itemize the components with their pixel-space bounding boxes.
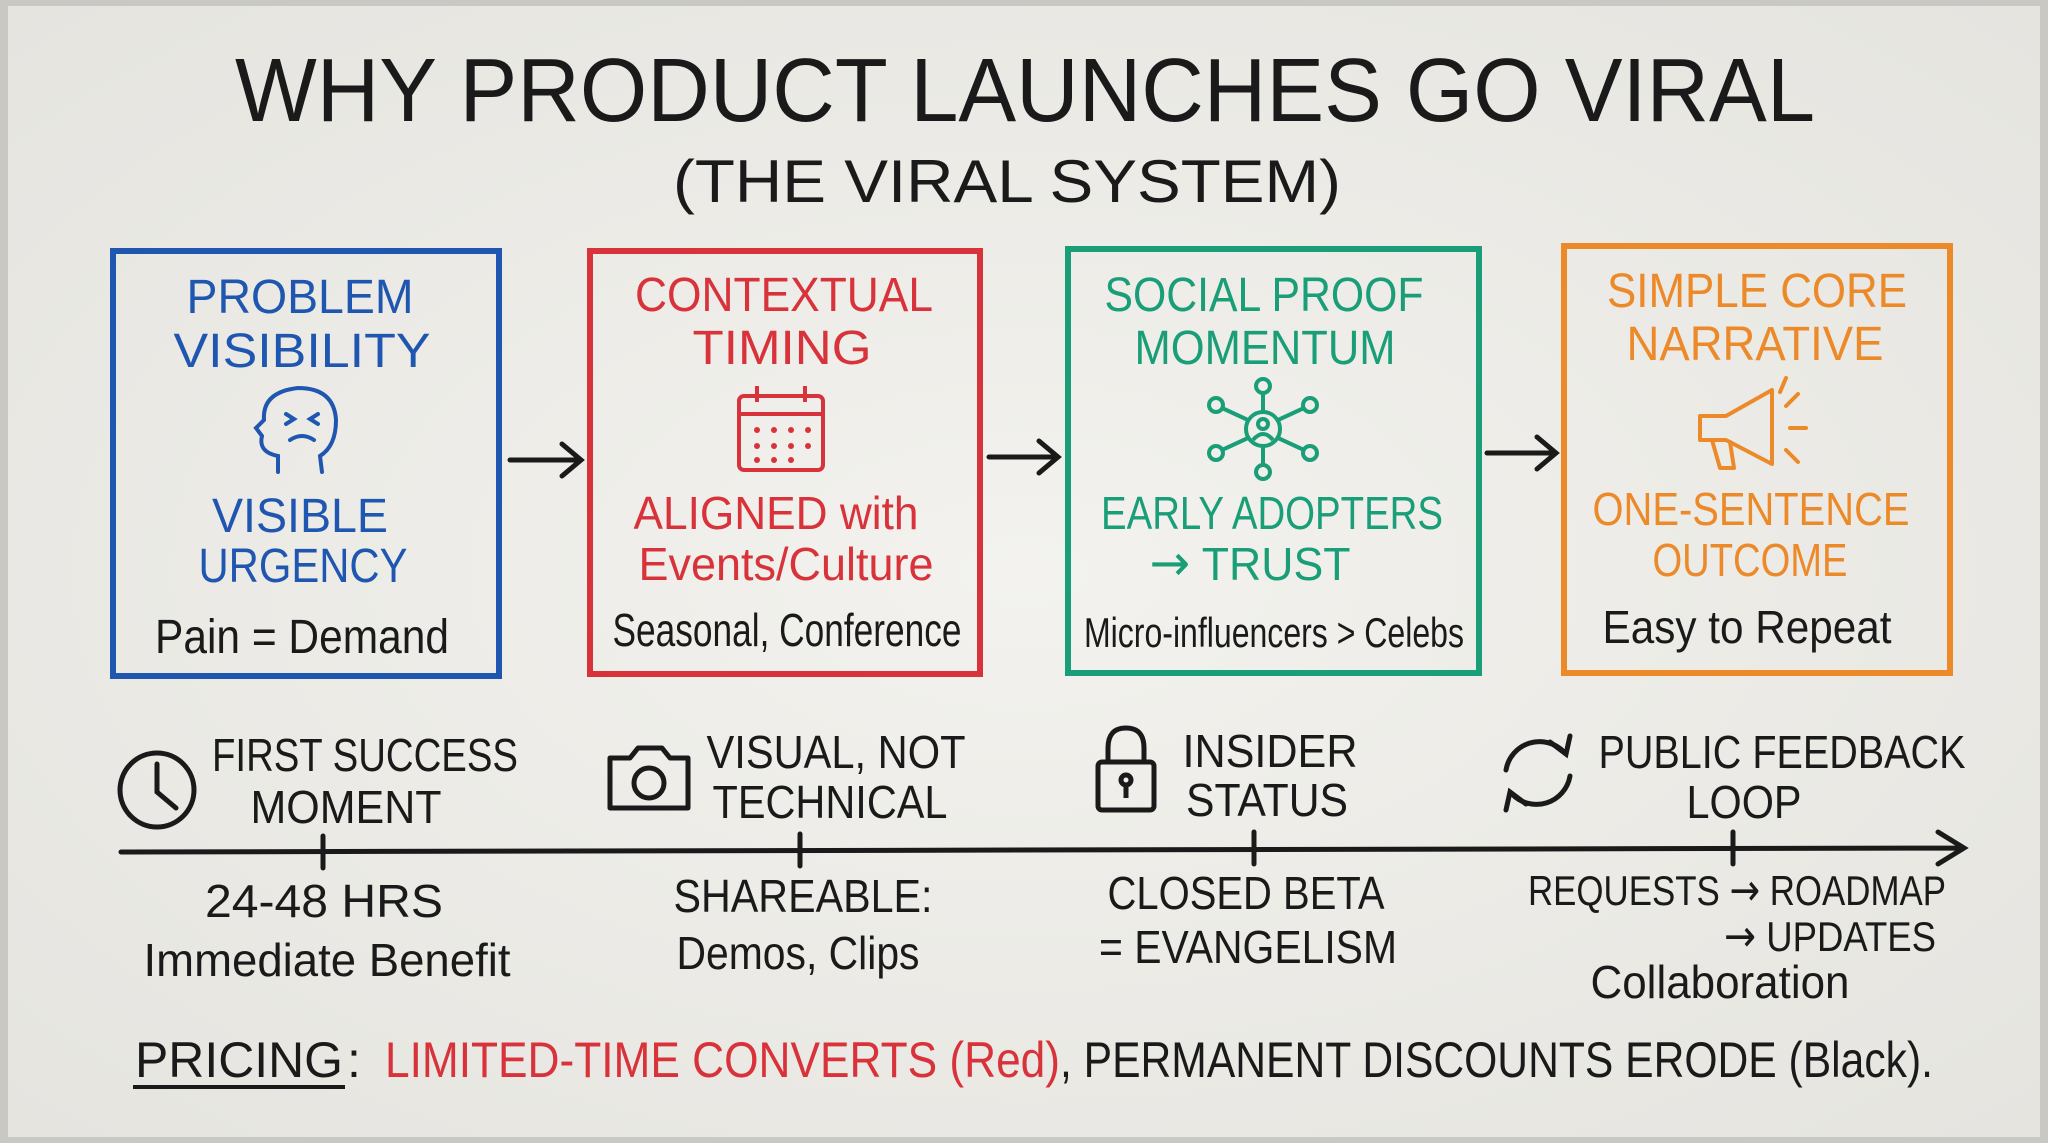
panel: social proof momentum: SOCIAL PROOF: [1104, 269, 1424, 322]
item: public feedback loop: REQUESTS → ROADMAP: [1528, 865, 1946, 916]
panel: problem visibility: PROBLEM: [186, 271, 414, 324]
pricing line: PRICING: [135, 1032, 343, 1088]
item: first success moment: MOMENT: [250, 781, 442, 833]
panel: contextual timing: CONTEXTUAL: [635, 269, 933, 322]
panel: social proof momentum: → TRUST: [1150, 534, 1350, 592]
item: public feedback loop: Collaboration: [1590, 956, 1850, 1008]
panel: social proof momentum: [1068, 249, 1479, 673]
pricing line: :: [347, 1032, 361, 1088]
icon: clock: [120, 753, 194, 827]
panel: contextual timing: Seasonal, Conference: [612, 604, 962, 656]
item: first success moment: Immediate Benefit: [144, 934, 511, 986]
item: first success moment: FIRST SUCCESS: [212, 729, 518, 781]
arrow 1: [510, 444, 581, 476]
item: visual not technical: SHAREABLE:: [674, 870, 932, 922]
panel: social proof momentum: EARLY ADOPTERS: [1101, 487, 1443, 539]
icon: cycle arrows: [1506, 736, 1570, 810]
panel: contextual timing: ALIGNED with: [634, 487, 918, 539]
item: public feedback loop: PUBLIC FEEDBACK: [1598, 726, 1966, 778]
panel: contextual timing: [590, 251, 980, 674]
panel: simple core narrative: [1564, 246, 1950, 673]
panel: contextual timing: Events/Culture: [638, 538, 934, 590]
panel: problem visibility: VISIBLE: [212, 490, 388, 543]
arrow 2: [989, 441, 1058, 473]
item: first success moment: [120, 729, 518, 986]
item: insider status: INSIDER: [1182, 725, 1358, 777]
item: visual not technical: Demos, Clips: [676, 927, 920, 979]
item: insider status: [1098, 725, 1397, 973]
panel: problem visibility: VISIBILITY: [174, 325, 430, 378]
panel: problem visibility: Pain = Demand: [155, 611, 449, 664]
icon: camera: [610, 748, 688, 808]
panel: social proof momentum: MOMENTUM: [1134, 322, 1396, 375]
timeline arrow: [121, 832, 1964, 868]
panel: simple core narrative: OUTCOME: [1652, 534, 1848, 586]
item: first success moment: 24-48 HRS: [205, 875, 443, 927]
panel: simple core narrative: Easy to Repeat: [1602, 601, 1892, 653]
item: visual not technical: [610, 726, 966, 979]
pricing line: LIMITED-TIME CONVERTS (Red): [385, 1032, 1060, 1088]
item: visual not technical: TECHNICAL: [712, 776, 948, 828]
icon: calendar: [739, 386, 823, 470]
panel: simple core narrative: NARRATIVE: [1626, 318, 1884, 371]
icon: stressed head: [256, 388, 336, 472]
panel: social proof momentum: Micro-influencers > Celebs: [1084, 609, 1464, 656]
arrow 3: [1487, 437, 1556, 469]
item: insider status: = EVANGELISM: [1099, 921, 1397, 973]
panel: simple core narrative: SIMPLE CORE: [1607, 265, 1907, 318]
item: public feedback loop: LOOP: [1686, 776, 1802, 828]
subtitle: (THE VIRAL SYSTEM): [673, 148, 1341, 215]
icon: lock: [1098, 728, 1154, 810]
panel: problem visibility: [113, 251, 499, 676]
item: visual not technical: VISUAL, NOT: [706, 726, 966, 778]
item: public feedback loop: → UPDATES: [1724, 911, 1936, 962]
icon: network: [1209, 379, 1317, 479]
item: public feedback loop: [1506, 726, 1966, 1008]
panel: simple core narrative: ONE-SENTENCE: [1592, 483, 1910, 535]
item: insider status: STATUS: [1186, 774, 1348, 826]
panel: contextual timing: TIMING: [692, 322, 872, 375]
title: WHY PRODUCT LAUNCHES GO VIRAL: [235, 41, 1815, 141]
icon: megaphone: [1700, 378, 1806, 468]
item: insider status: CLOSED BETA: [1108, 867, 1385, 919]
panel: problem visibility: URGENCY: [198, 540, 408, 593]
pricing line: [133, 1032, 1933, 1088]
